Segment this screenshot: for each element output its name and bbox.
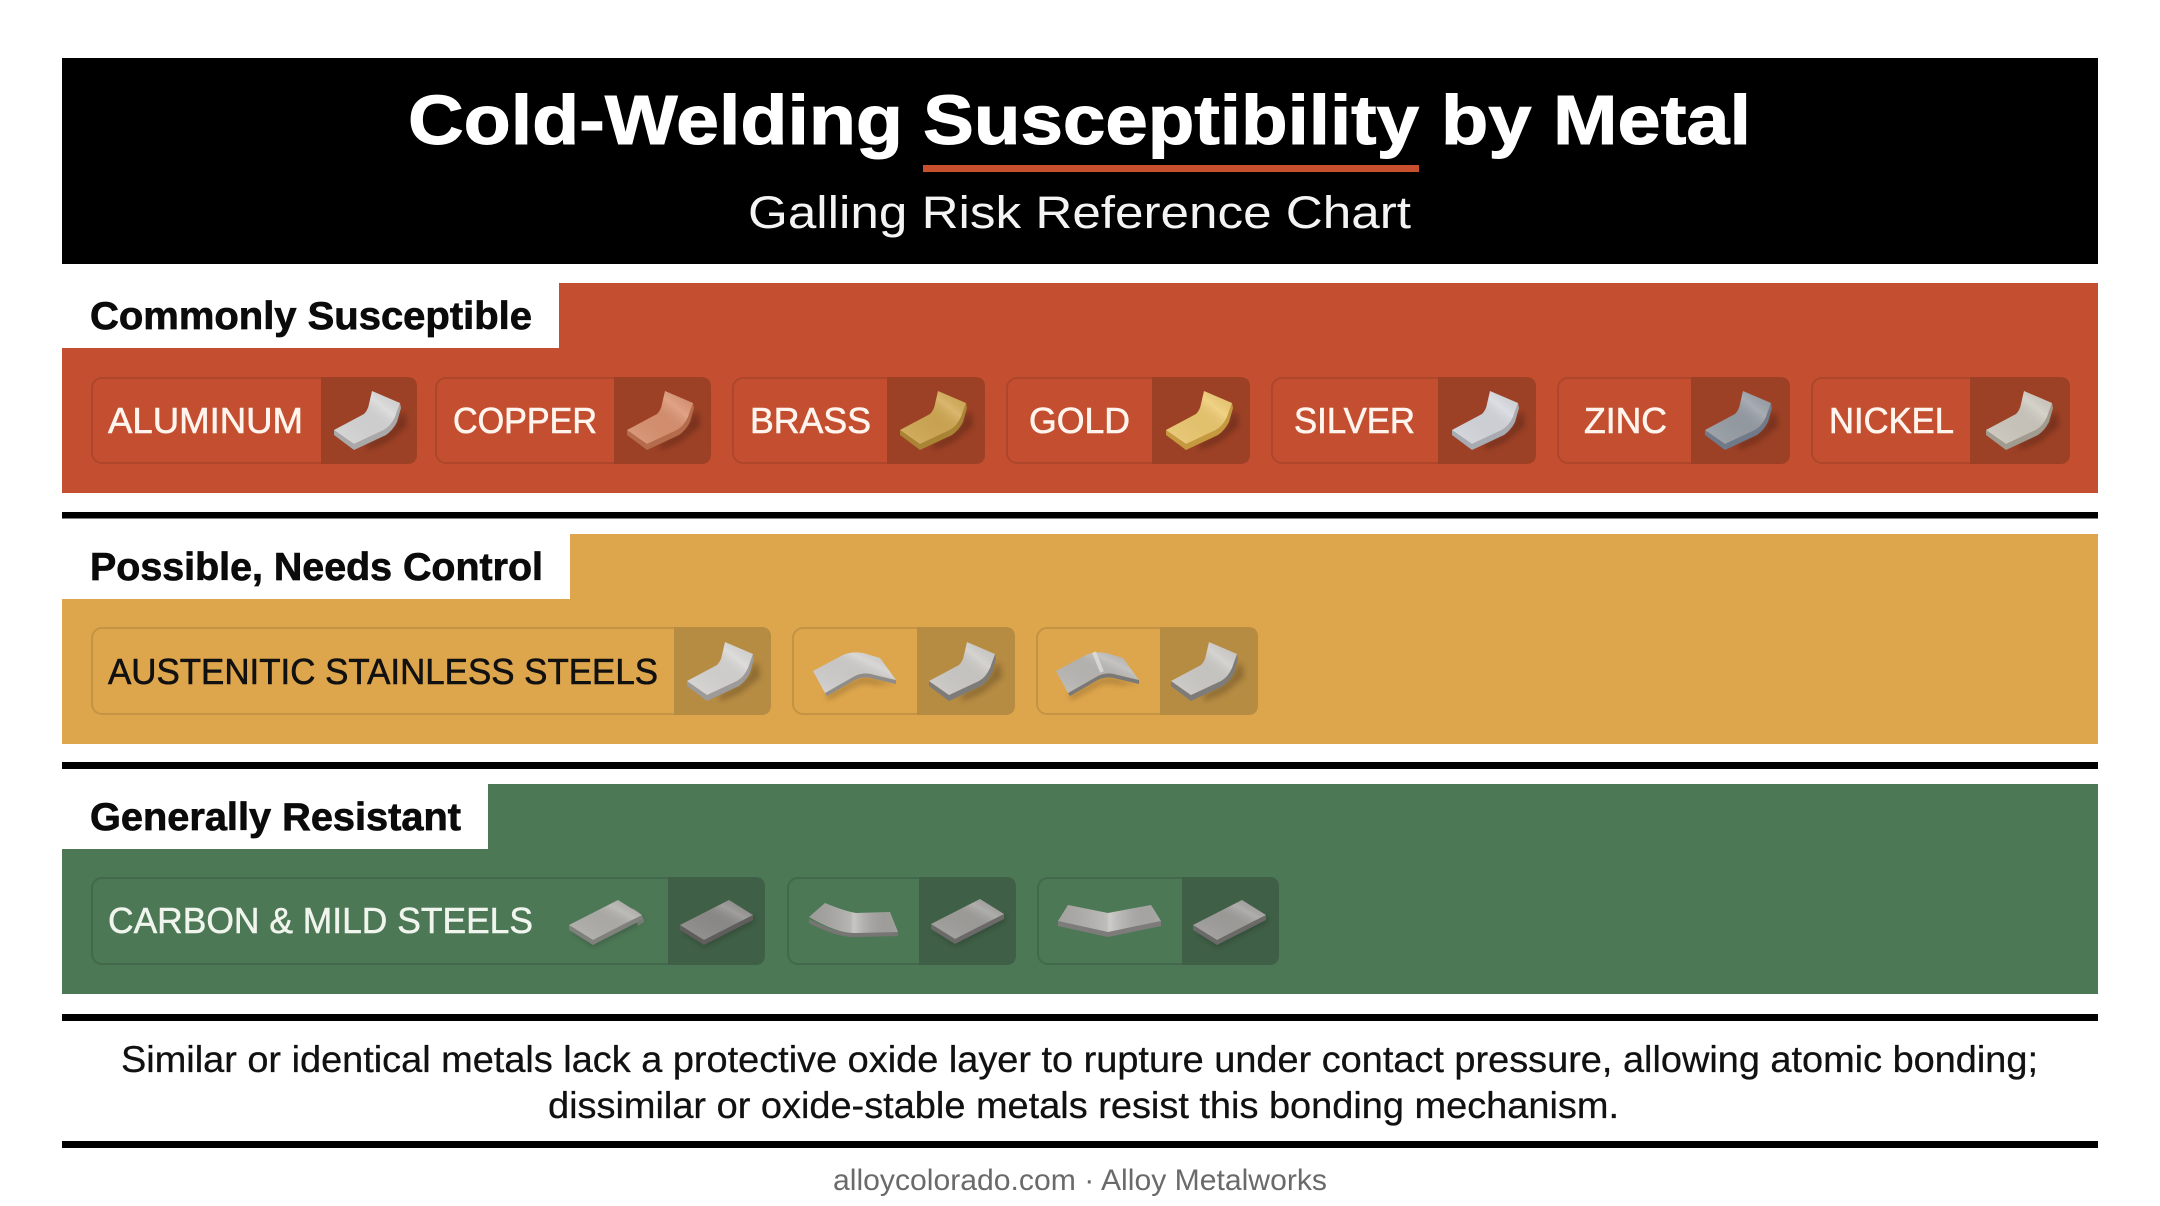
subtitle: Galling Risk Reference Chart bbox=[748, 187, 1412, 238]
panel: commonly susceptible bbox=[62, 283, 2098, 493]
icon: flat plate bbox=[680, 900, 754, 947]
icon: creased arch plate bbox=[1056, 652, 1139, 700]
header banner bbox=[62, 58, 2098, 264]
tag: possible, needs control bbox=[62, 534, 570, 599]
chip: nickel bbox=[1812, 377, 2070, 464]
chip: aluminum: ALUMINUM bbox=[108, 400, 303, 441]
title: Susceptibility bbox=[923, 81, 1419, 159]
chip: copper: COPPER bbox=[453, 400, 597, 441]
chip: carbon and mild steels: CARBON & MILD STEELS bbox=[108, 900, 533, 941]
icon: shallow V plate bbox=[1058, 905, 1161, 937]
tag: possible, needs control: Possible, Needs Control bbox=[90, 546, 543, 589]
icon: bent plate bbox=[929, 642, 1002, 701]
chip: nickel: NICKEL bbox=[1829, 400, 1954, 441]
icon: flat plate with lip bbox=[569, 900, 644, 947]
chip: stainless sample 3 bbox=[1037, 627, 1258, 715]
explanatory note: dissimilar or oxide-stable metals resist this bonding mechanism. bbox=[548, 1085, 1619, 1126]
icon: flat plate bbox=[1193, 900, 1267, 947]
chip: gold: GOLD bbox=[1029, 400, 1130, 441]
icon: arched plate bbox=[813, 652, 896, 700]
chip: zinc bbox=[1558, 377, 1790, 464]
tag: commonly susceptible bbox=[62, 283, 559, 348]
chip: stainless sample 2 bbox=[793, 627, 1015, 715]
chip: gold bbox=[1007, 377, 1250, 464]
chip: copper bbox=[436, 377, 711, 464]
panel: generally resistant bbox=[62, 784, 2098, 994]
explanatory note: Similar or identical metals lack a protective oxide layer to rupture under contact pressure, allowing atomic bonding; bbox=[121, 1039, 2038, 1080]
chip: silver: SILVER bbox=[1294, 400, 1415, 441]
title: by Metal bbox=[1441, 81, 1751, 159]
chip: brass bbox=[733, 377, 985, 464]
icon: flat plate bbox=[931, 899, 1005, 946]
panel: possible, needs control bbox=[62, 534, 2098, 744]
title underline bbox=[923, 165, 1419, 172]
explanatory note bbox=[121, 1039, 2038, 1126]
chip: brass: BRASS bbox=[750, 400, 871, 441]
icon: bent plate bbox=[1171, 642, 1244, 701]
source credit: alloycolorado.com · Alloy Metalworks bbox=[833, 1164, 1327, 1197]
chip: silver bbox=[1272, 377, 1536, 464]
title: Cold-Welding bbox=[408, 81, 903, 159]
chip: austenitic stainless steels bbox=[92, 627, 771, 715]
tag: generally resistant: Generally Resistant bbox=[90, 796, 461, 839]
chip: carbon sample 3 bbox=[1038, 877, 1279, 965]
chip: austenitic stainless steels: AUSTENITIC STAINLESS STEELS bbox=[108, 651, 658, 692]
chip: carbon and mild steels bbox=[92, 877, 765, 965]
tag: generally resistant bbox=[62, 784, 488, 849]
tag: commonly susceptible: Commonly Susceptible bbox=[90, 295, 532, 338]
icon: shallow bend plate bbox=[809, 903, 898, 937]
chip: aluminum bbox=[92, 377, 417, 464]
chip: carbon sample 2 bbox=[788, 877, 1016, 965]
chip: zinc: ZINC bbox=[1584, 400, 1667, 441]
